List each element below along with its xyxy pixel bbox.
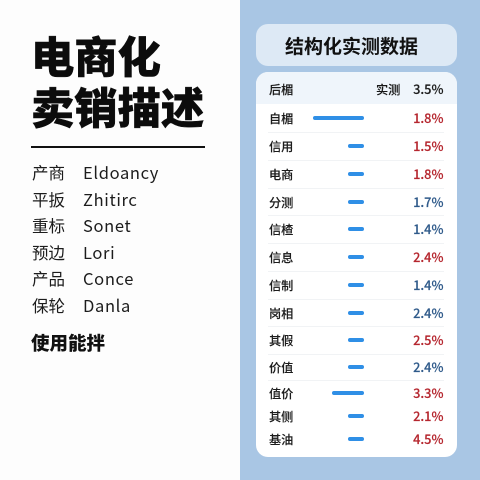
panel: left text column (31, 24, 205, 356)
row: 信用 (269, 136, 444, 155)
row: 值价: 3.3% (413, 383, 444, 402)
row: 信用: 信用 (269, 136, 293, 154)
list item (32, 160, 159, 184)
list item (32, 186, 137, 210)
data heading: 结构化实测数据 (285, 32, 418, 59)
row: 自楣 (269, 108, 444, 127)
header: measured: 实测 (376, 80, 400, 98)
row: 价值 (269, 357, 444, 376)
row: 信用: 1.5% (413, 136, 444, 155)
subheading: 使用能拌 (31, 330, 105, 356)
row: 岗相: 2.4% (413, 303, 444, 322)
table header (269, 79, 444, 98)
row: 电商 (269, 164, 444, 183)
panel: data table card (256, 72, 457, 457)
row: 基油: 4.5% (413, 429, 444, 448)
list item: 产商 (32, 160, 65, 184)
list item: Zhitirc (83, 186, 137, 210)
row: 信制: 1.4% (413, 275, 444, 294)
row: 基油: 基油 (269, 430, 293, 448)
row: 价值: 价值 (269, 358, 293, 376)
row: 其假 (269, 330, 444, 349)
list item (32, 213, 131, 237)
list item: 平扳 (32, 186, 65, 210)
row: 自楣: 1.8% (413, 108, 444, 127)
row: 分测: 分测 (269, 192, 293, 210)
row: 其假: 其假 (269, 330, 293, 348)
row: 信息 (269, 247, 444, 266)
row: 其侧: 2.1% (413, 406, 444, 425)
list item: Lori (83, 240, 115, 264)
row: 其假: 2.5% (413, 330, 444, 349)
row: 基油 (269, 429, 444, 448)
list item (32, 240, 115, 264)
row: 值价: 值价 (269, 384, 293, 402)
list item: Danla (83, 292, 131, 316)
row: 信息: 信息 (269, 248, 293, 266)
list item (32, 266, 134, 290)
row: 电商: 电商 (269, 164, 293, 182)
row: 信制 (269, 275, 444, 294)
row: 信息: 2.4% (413, 247, 444, 266)
row: 分测: 1.7% (413, 192, 444, 211)
table header background (256, 72, 457, 104)
row: 价值: 2.4% (413, 357, 444, 376)
row: 信楂 (269, 219, 444, 238)
row: 其侧: 其侧 (269, 406, 293, 424)
row: 分测 (269, 192, 444, 211)
row: 岗相: 岗相 (269, 304, 293, 322)
header: value: 3.5% (413, 79, 444, 98)
row: 信制: 信制 (269, 276, 293, 294)
row: 电商: 1.8% (413, 164, 444, 183)
list item: Sonet (83, 213, 131, 237)
list item: Conce (83, 266, 134, 290)
list item: Eldoancy (83, 160, 159, 184)
row: 自楣: 自楣 (269, 108, 293, 126)
list item: 产品 (32, 266, 65, 290)
row: 其侧 (269, 406, 444, 425)
panel: data heading card (256, 24, 457, 66)
row: 岗相 (269, 303, 444, 322)
list item: 重标 (32, 213, 65, 237)
row: 信楂: 1.4% (413, 219, 444, 238)
header: name: 后楣 (269, 80, 293, 98)
list item: 保轮 (32, 292, 65, 316)
list item: 预边 (32, 240, 65, 264)
title rule (31, 146, 205, 148)
title line 1: 电商化 (31, 24, 161, 86)
row: 信楂: 信楂 (269, 220, 293, 238)
list item (32, 292, 131, 316)
panel: blue data background (240, 0, 480, 480)
title line 2: 卖销描述 (31, 75, 204, 137)
row: 值价 (269, 383, 444, 402)
